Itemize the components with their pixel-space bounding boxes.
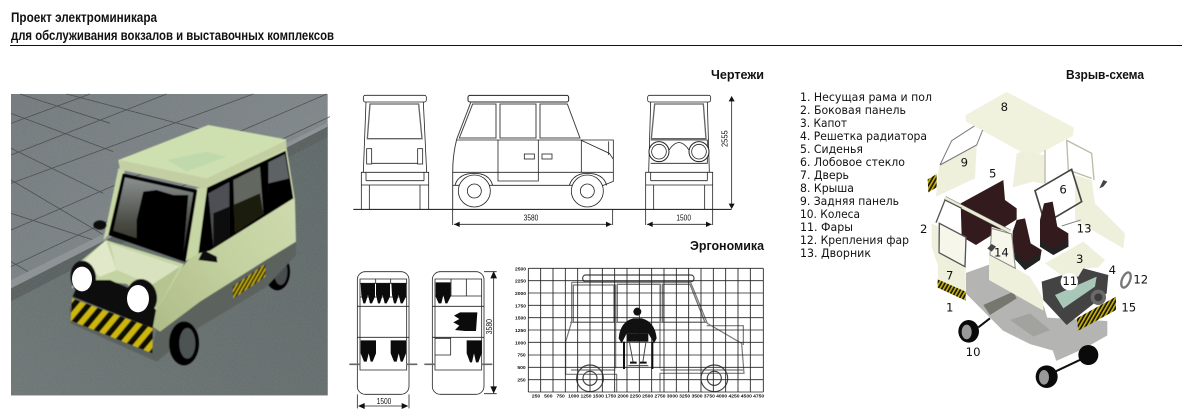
x axis labels: 1000 — [568, 393, 579, 399]
anthropometric grid chart — [515, 266, 764, 399]
seats — [1013, 202, 1068, 270]
headlight mount ring — [1119, 271, 1133, 289]
wheels and axles — [958, 318, 1098, 388]
front view — [646, 95, 713, 209]
rear view — [361, 95, 429, 209]
heading: ergonomics: Эргономика — [690, 238, 765, 253]
hood — [1045, 242, 1105, 277]
legend list: 5. Сиденья — [800, 142, 863, 156]
legend list: 9. Задняя панель — [800, 194, 899, 208]
y axis labels: 2000 — [515, 291, 526, 297]
part numbers: 13 — [1077, 222, 1092, 236]
legend list: 4. Решетка радиатора — [800, 129, 927, 143]
part numbers: 1 — [946, 300, 953, 314]
x axis labels: 3750 — [704, 393, 715, 399]
x axis labels: 3000 — [667, 393, 678, 399]
part numbers: 14 — [994, 246, 1009, 260]
panel: orthographic drawings — [353, 95, 735, 227]
legend list — [800, 90, 932, 260]
body side — [153, 148, 296, 332]
lower body — [69, 240, 296, 362]
roof — [967, 93, 1072, 156]
seated figure in wheelchair — [619, 308, 657, 369]
hood — [72, 240, 184, 311]
ground line — [353, 208, 732, 211]
x axis labels: 4750 — [753, 393, 764, 399]
legend list: 7. Дверь — [800, 168, 849, 182]
part numbers: 11 — [1062, 274, 1077, 288]
part numbers: 2 — [920, 222, 927, 236]
part numbers: 12 — [1133, 273, 1148, 287]
width dimension — [357, 394, 409, 409]
dimensions — [453, 96, 735, 227]
title: для обслуживания вокзалов и выставочных комплексов — [11, 27, 334, 43]
width dimension: 1500 — [377, 396, 391, 406]
y axis labels — [515, 266, 526, 383]
y axis labels: 1000 — [515, 340, 526, 346]
dimensions: 2555 — [719, 130, 729, 147]
y axis labels: 1250 — [515, 328, 526, 334]
legend list: 1. Несущая рама и пол — [800, 90, 932, 104]
x axis labels: 2500 — [642, 393, 653, 399]
legend list: 13. Дворник — [800, 246, 871, 260]
legend list: 8. Крыша — [800, 181, 854, 195]
plan view right — [424, 271, 497, 394]
y axis labels: 500 — [517, 365, 526, 371]
side windows — [198, 151, 293, 253]
x axis labels: 1500 — [593, 393, 604, 399]
dimensions: 1500 — [676, 212, 691, 222]
part numbers: 7 — [946, 269, 953, 283]
x axis labels: 4000 — [716, 393, 727, 399]
part numbers: 3 — [1076, 252, 1083, 266]
x axis labels: 2750 — [654, 393, 666, 399]
part numbers: 10 — [966, 345, 981, 359]
engine and grille — [1042, 268, 1108, 325]
x axis labels: 250 — [532, 393, 540, 399]
x axis labels: 4500 — [741, 393, 752, 399]
roof — [118, 125, 287, 188]
chassis — [967, 265, 1107, 360]
side view — [453, 95, 613, 209]
y axis labels: 750 — [517, 353, 526, 359]
legend list: 12. Крепления фар — [800, 233, 909, 247]
x axis labels: 2250 — [630, 393, 641, 399]
heading: drawings: Чертежи — [711, 67, 764, 82]
part numbers: 6 — [1059, 182, 1067, 196]
x axis labels: 500 — [544, 393, 553, 399]
headlights — [68, 259, 98, 296]
title — [11, 9, 334, 43]
x axis labels: 750 — [557, 393, 565, 399]
vehicle outline — [566, 275, 744, 392]
x axis labels: 3250 — [679, 393, 690, 399]
part numbers: 4 — [1109, 263, 1116, 277]
x axis labels: 4250 — [728, 393, 740, 399]
windshield — [108, 173, 197, 262]
part numbers — [920, 100, 1148, 359]
legend list: 3. Капот — [800, 116, 847, 130]
plan view right: 3580 — [484, 319, 494, 334]
part numbers: 8 — [1001, 100, 1008, 114]
x axis labels: 2000 — [617, 393, 629, 399]
far side panel — [1013, 140, 1125, 248]
y axis labels: 1750 — [515, 303, 526, 309]
y axis labels: 250 — [517, 377, 526, 383]
windshield pillar — [103, 168, 125, 240]
wiper — [1062, 220, 1081, 226]
bench seat — [961, 180, 1017, 245]
hazard bumper — [71, 298, 153, 353]
panel: ergonomics drawings — [349, 266, 764, 409]
front hazard plate — [1077, 297, 1116, 331]
legend list: 11. Фары — [800, 220, 853, 234]
legend list: 10. Колеса — [800, 207, 860, 221]
side panel — [932, 198, 1043, 311]
side hazard — [233, 264, 265, 298]
y axis labels: 2500 — [515, 266, 526, 272]
rear wheel — [265, 253, 290, 290]
y axis labels: 2250 — [515, 279, 526, 285]
x axis labels: 1750 — [605, 393, 616, 399]
legend list: 6. Лобовое стекло — [800, 155, 905, 169]
windshield frame — [1035, 169, 1082, 223]
title: Проект электроминикара — [11, 9, 157, 25]
heading: exploded view: Взрыв-схема — [1066, 67, 1145, 82]
mirror — [1099, 180, 1107, 188]
x axis labels: 1250 — [580, 393, 592, 399]
door — [938, 222, 966, 301]
front wheel — [169, 321, 199, 365]
plan view left — [349, 272, 417, 394]
part numbers: 9 — [961, 156, 968, 170]
part numbers: 15 — [1121, 300, 1136, 314]
car — [68, 125, 296, 365]
part numbers: 5 — [989, 167, 996, 181]
grid — [528, 268, 763, 392]
x axis labels — [532, 393, 764, 399]
x axis labels: 3500 — [691, 393, 703, 399]
panel: 3D render of the electric minicar — [11, 94, 330, 395]
mirrors — [93, 220, 107, 230]
second mirror — [987, 244, 996, 252]
grille — [73, 280, 156, 328]
dimensions: 3580 — [524, 212, 538, 222]
y axis labels: 1500 — [515, 316, 526, 322]
legend list: 2. Боковая панель — [800, 103, 906, 117]
exploded view diagram — [920, 93, 1148, 388]
rear panel — [928, 126, 983, 197]
